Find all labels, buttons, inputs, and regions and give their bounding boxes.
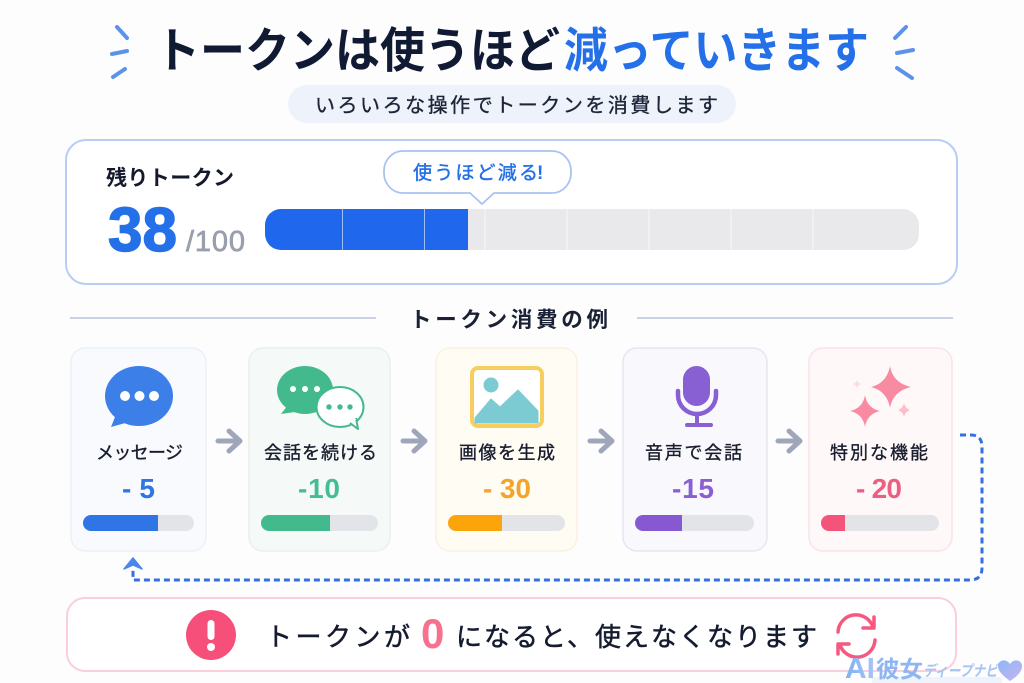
value: - 5 — [122, 473, 155, 504]
icon: chat bubbles — [277, 366, 364, 429]
arrow — [218, 431, 240, 451]
arrow — [778, 431, 800, 451]
icon: left title sparks — [112, 27, 127, 77]
warning text: トークンが — [266, 617, 410, 654]
card: conversation — [249, 348, 390, 551]
meter — [821, 515, 939, 531]
panel: remaining tokens — [66, 140, 957, 284]
watermark: ディープナビ — [923, 660, 1000, 681]
icon: microphone — [678, 366, 716, 425]
label: 会話を続ける — [264, 439, 377, 465]
card: voice — [623, 348, 767, 551]
meter — [448, 515, 565, 531]
meter — [635, 515, 754, 531]
card: image — [436, 348, 577, 551]
card: special — [809, 348, 952, 551]
warning text: になると、使えなくなります — [456, 617, 817, 654]
icon: right title sparks — [895, 27, 913, 78]
title: トークンは使うほど — [155, 11, 560, 81]
icon: picture — [472, 368, 542, 426]
title: 減っていきます — [564, 11, 869, 81]
subtitle pill: いろいろな操作でトークンを消費します — [315, 89, 718, 118]
arrow — [403, 431, 425, 451]
watermark — [845, 650, 1022, 683]
meter — [83, 515, 194, 531]
warning text: 0 — [421, 610, 444, 657]
title — [155, 11, 869, 81]
subtitle pill — [288, 85, 736, 123]
callout — [384, 151, 571, 204]
watermark: 彼女 — [876, 650, 923, 683]
label: remaining tokens: 残りトークン — [106, 162, 234, 192]
value: - 20 — [856, 473, 902, 504]
panel: warning — [67, 598, 956, 671]
warning text — [266, 610, 817, 657]
icon: message bubble — [105, 366, 173, 427]
number: 38: 38 — [108, 196, 177, 265]
icon: sparkles — [850, 366, 911, 427]
label: メッセージ — [96, 439, 183, 465]
icon: exclamation — [186, 610, 236, 660]
card: message — [71, 348, 206, 551]
value: -10 — [298, 473, 340, 504]
label: 画像を生成 — [459, 439, 555, 465]
number: /100: /100 — [186, 226, 245, 258]
arrow: dashed loop back — [124, 435, 982, 580]
icon: refresh — [838, 615, 875, 657]
meter — [261, 515, 378, 531]
value: -15 — [672, 473, 714, 504]
section heading: トークン消費の例 — [410, 303, 608, 334]
value: - 30 — [483, 473, 531, 504]
progress bar — [265, 209, 919, 250]
arrow — [590, 431, 612, 451]
callout: ! — [537, 163, 543, 184]
callout: 使うほど減る — [413, 158, 538, 185]
label: 特別な機能 — [830, 439, 928, 465]
label: 音声で会話 — [645, 439, 742, 465]
